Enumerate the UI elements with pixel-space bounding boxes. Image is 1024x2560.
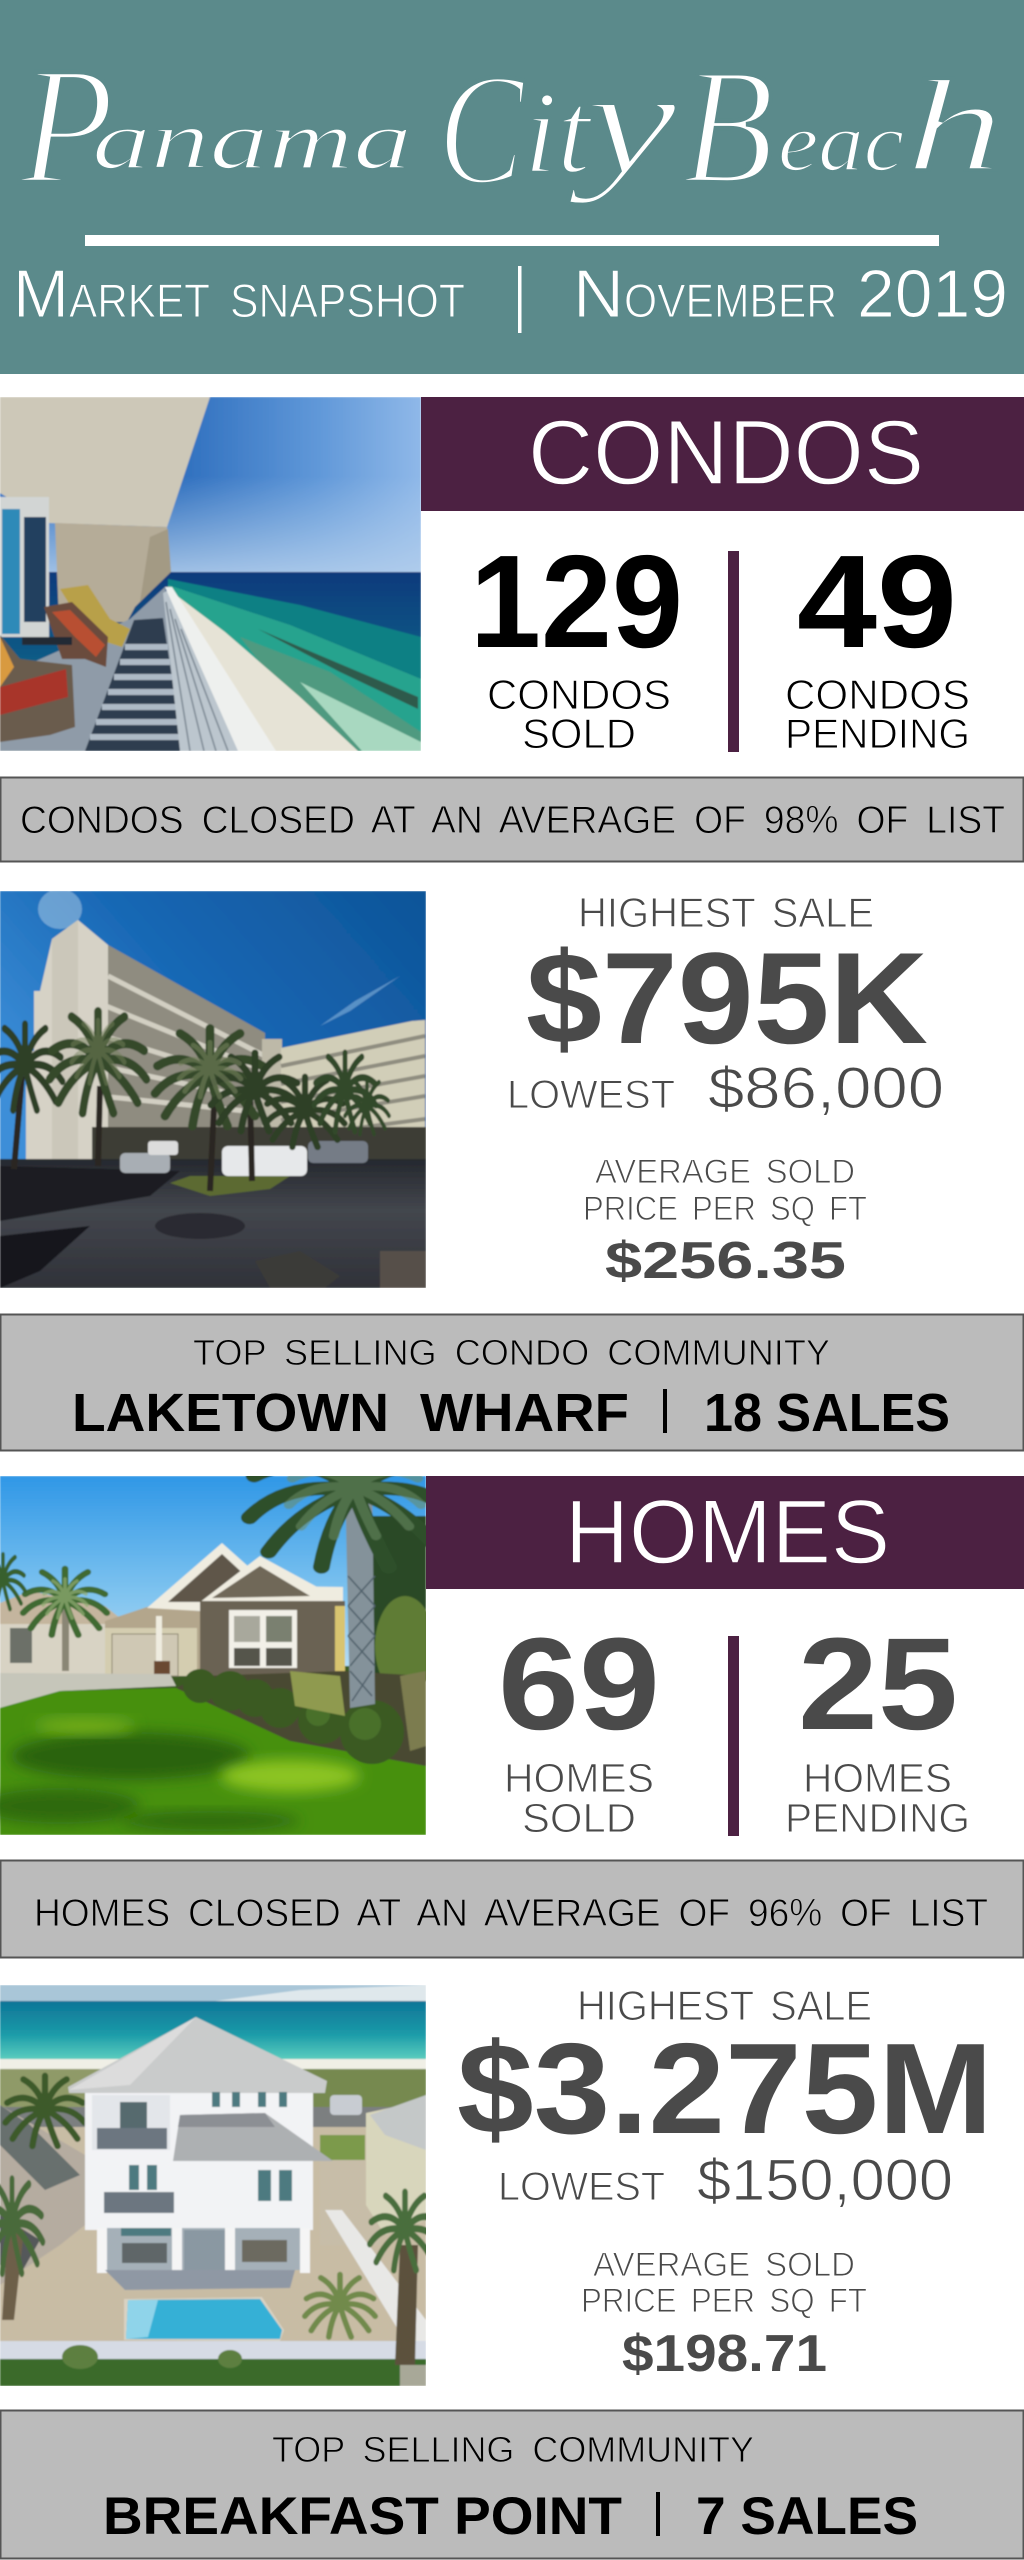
average sold price per square foot: PRICE PER SQ FT bbox=[581, 2282, 867, 2320]
average sold price per square foot: AVERAGE SOLD bbox=[593, 2246, 855, 2284]
panel: condo prices bbox=[0, 889, 1024, 1450]
callout: condos list percentage bbox=[0, 778, 1024, 862]
average sold price per square foot bbox=[581, 2246, 867, 2383]
stat: 129 condos sold: SOLD bbox=[522, 710, 636, 757]
heading bar: condos: CONDOS bbox=[528, 402, 924, 504]
panel: header banner bbox=[0, 0, 1024, 374]
subtitle: november 2019: N bbox=[573, 256, 624, 332]
lowest sale: $86,000 bbox=[708, 1056, 944, 1121]
title: Panama City Beach: B bbox=[682, 34, 774, 218]
subtitle: november 2019: OVEMBER bbox=[624, 274, 837, 327]
label: highest sale: HIGHEST SALE bbox=[578, 889, 874, 936]
heading bar: homes bbox=[426, 1476, 1024, 1589]
title: Panama City Beach: h bbox=[905, 52, 1005, 199]
callout: condos list percentage: CONDOS CLOSED AT AN AVERAGE OF 98% OF LIST bbox=[20, 799, 1005, 842]
stat: 25 homes pending: HOMES bbox=[803, 1755, 952, 1801]
average sold price per square foot: $256.35 bbox=[605, 1232, 846, 1290]
average sold price per square foot: AVERAGE SOLD bbox=[595, 1153, 855, 1191]
callout: top selling condo community: LAKETOWN bbox=[72, 1383, 389, 1443]
subtitle: market snapshot: M bbox=[13, 256, 69, 332]
stat: 129 condos sold bbox=[470, 528, 683, 757]
photo: white beach house with pool bbox=[0, 1985, 440, 2386]
title: Panama City Beach: it bbox=[524, 67, 593, 198]
panel: homes summary bbox=[0, 1476, 1024, 1958]
heading bar: condos bbox=[421, 397, 1024, 511]
stat: 25 homes pending: 25 bbox=[798, 1610, 958, 1757]
lowest sale bbox=[507, 1056, 944, 1121]
callout: top selling community: BREAKFAST POINT bbox=[103, 2487, 622, 2546]
stat: 25 homes pending: PENDING bbox=[785, 1795, 970, 1841]
stat: 129 condos sold: CONDOS bbox=[487, 671, 671, 718]
lowest sale bbox=[498, 2148, 953, 2213]
title: Panama City Beach: P bbox=[19, 33, 114, 219]
photo: craftsman home with lawn bbox=[0, 1476, 426, 1835]
stat divider bbox=[728, 1636, 739, 1836]
lowest sale: $150,000 bbox=[697, 2148, 953, 2213]
average sold price per square foot: $198.71 bbox=[622, 2325, 827, 2383]
label: highest sale: HIGHEST SALE bbox=[577, 1982, 872, 2029]
callout: top selling condo community: TOP SELLING CONDO COMMUNITY bbox=[193, 1332, 830, 1373]
stat: 49 condos pending: 49 bbox=[797, 528, 957, 675]
title: Panama City Beach: C bbox=[438, 40, 526, 218]
panel: home prices bbox=[0, 1982, 1024, 2558]
stat: 69 homes sold: 69 bbox=[498, 1610, 660, 1757]
lowest sale: LOWEST bbox=[498, 2165, 665, 2209]
subtitle divider bbox=[518, 266, 522, 333]
callout: top selling condo community: WHARF bbox=[420, 1383, 629, 1443]
heading bar: homes: HOMES bbox=[565, 1482, 890, 1583]
stat: 69 homes sold: HOMES bbox=[504, 1755, 654, 1801]
title: Panama City Beach: eac bbox=[778, 96, 904, 189]
stat divider bbox=[728, 551, 739, 752]
stat: 25 homes pending bbox=[785, 1610, 970, 1841]
stat: 129 condos sold: 129 bbox=[470, 528, 683, 675]
lowest sale: LOWEST bbox=[507, 1073, 675, 1117]
callout: top selling community: TOP SELLING COMMUNITY bbox=[272, 2429, 754, 2470]
stat: 49 condos pending bbox=[785, 528, 970, 757]
subtitle: market snapshot: SNAPSHOT bbox=[230, 274, 465, 327]
stat: 49 condos pending: CONDOS bbox=[785, 671, 970, 718]
title underline bbox=[85, 235, 939, 246]
title: Panama City Beach: y bbox=[567, 39, 678, 205]
stat: 49 condos pending: PENDING bbox=[785, 710, 970, 757]
callout: homes list percentage: HOMES CLOSED AT AN AVERAGE OF 96% OF LIST bbox=[34, 1892, 988, 1935]
title: Panama City Beach bbox=[19, 33, 1005, 219]
callout: top selling condo community bbox=[0, 1314, 1024, 1450]
callout: top selling condo community: 18 SALES bbox=[704, 1383, 950, 1443]
subtitle: november 2019: 2019 bbox=[857, 256, 1008, 332]
photo: balcony overlooking the beach bbox=[0, 397, 421, 751]
title: Panama City Beach: anama bbox=[92, 94, 412, 187]
subtitle: market snapshot: ARKET bbox=[69, 274, 210, 327]
callout: homes list percentage bbox=[0, 1860, 1024, 1958]
panel: condos summary bbox=[0, 397, 1024, 862]
callout: top selling community bbox=[0, 2410, 1024, 2558]
stat: 69 homes sold bbox=[498, 1610, 660, 1841]
photo: condo building bbox=[0, 889, 426, 1288]
average sold price per square foot bbox=[583, 1153, 867, 1290]
stat: 69 homes sold: SOLD bbox=[522, 1795, 636, 1841]
value: $795K: $795K bbox=[526, 925, 928, 1071]
value: $3.275M: $3.275M bbox=[457, 2017, 993, 2161]
average sold price per square foot: PRICE PER SQ FT bbox=[583, 1190, 867, 1228]
callout: top selling community: 7 SALES bbox=[696, 2487, 918, 2546]
